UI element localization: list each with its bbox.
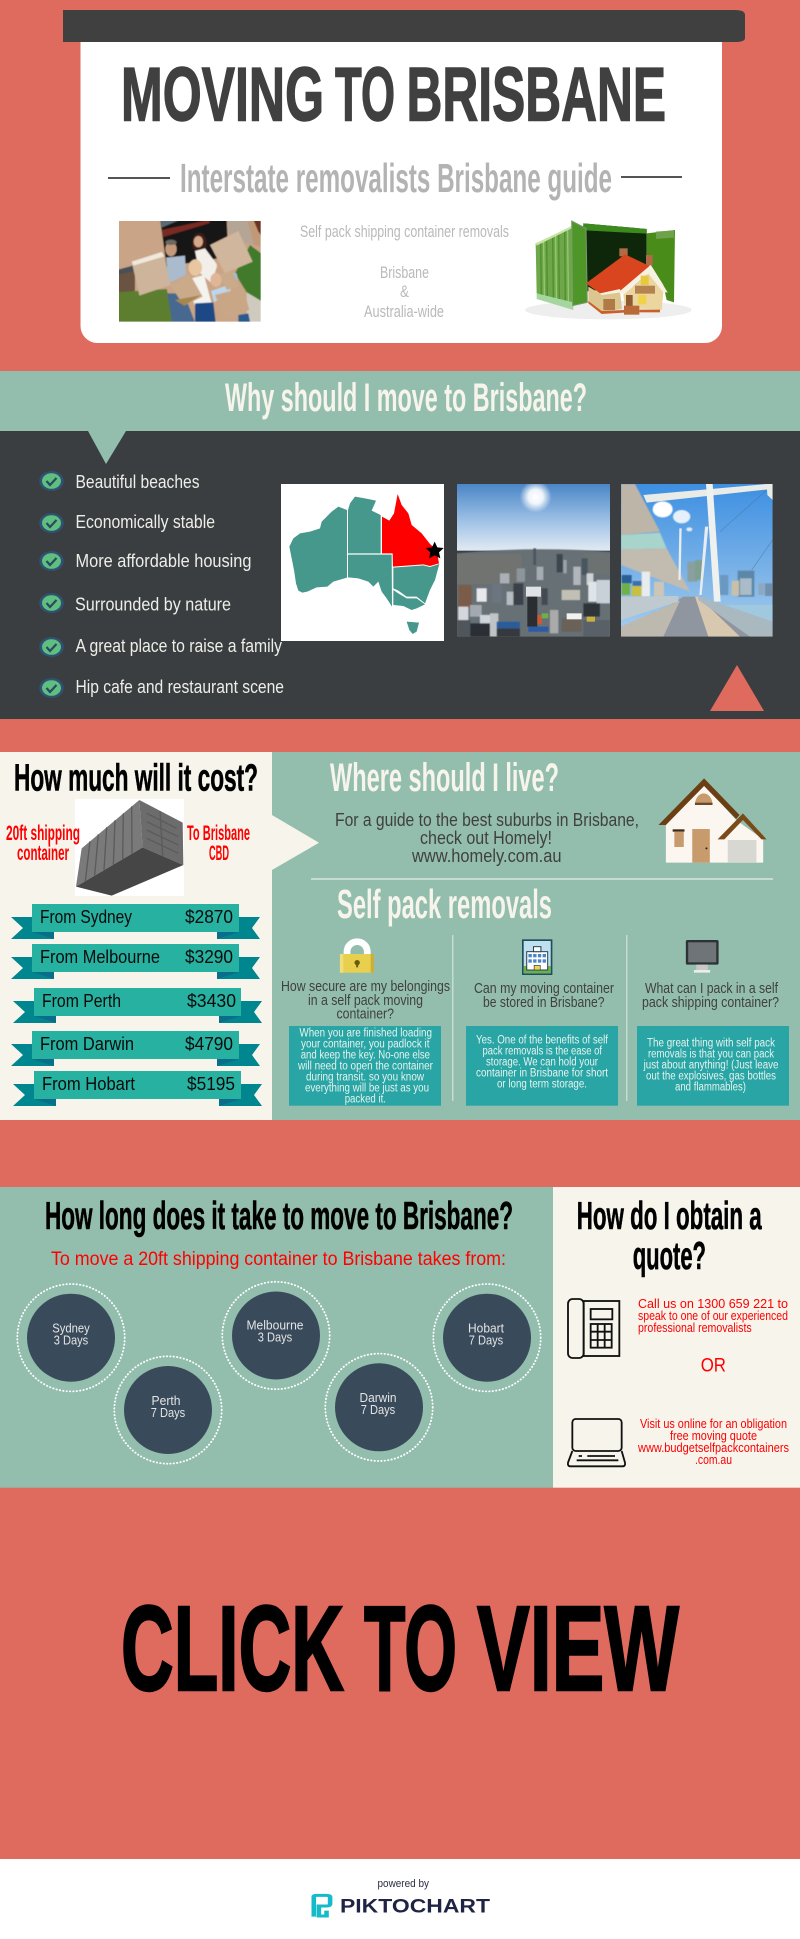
- heading: where should I live: Where should I live?: [330, 756, 559, 800]
- heading: quote: quote?: [633, 1235, 706, 1278]
- title: TO: [335, 52, 395, 138]
- ribbon: Sydney: From Sydney: [40, 907, 132, 927]
- ribbon: Melbourne: $3290: [185, 947, 233, 967]
- tagline text: &: [400, 282, 410, 301]
- question: storage: be stored in Brisbane?: [483, 995, 604, 1011]
- question: storage: Can my moving container: [474, 981, 614, 997]
- answer box: security: everything will be just as you: [305, 1083, 429, 1095]
- question: security: in a self pack moving: [308, 993, 423, 1009]
- list item: raise a family: A great place to raise a family: [76, 636, 282, 656]
- list item: cafe scene: Hip cafe and restaurant scene: [76, 677, 284, 697]
- answer box: what to pack: [637, 1026, 789, 1106]
- call to action: click to view: [121, 1580, 680, 1716]
- Homely guide text: check out Homely!: [420, 828, 552, 848]
- answer box: storage: container in Brisbane for short: [476, 1068, 609, 1080]
- ribbon: Perth: [13, 988, 262, 1023]
- ribbon: Melbourne: [11, 944, 260, 979]
- top dark bar: [63, 10, 745, 42]
- panel: how long does it take: [0, 1187, 553, 1488]
- list item: affordable housing: More affordable housing: [76, 551, 252, 571]
- circle: Hobart: [433, 1284, 541, 1391]
- arrow: [272, 815, 319, 870]
- ribbon: Sydney: $2870: [185, 907, 233, 927]
- answer box: storage: storage. We can hold your: [486, 1057, 598, 1069]
- call us text: Call us on 1300 659 221 to: [638, 1297, 788, 1311]
- panel: how do I obtain a quote: [553, 1187, 800, 1488]
- circle: Sydney: 3 Days: [54, 1334, 88, 1348]
- reasons list: [39, 471, 284, 698]
- tagline text: [300, 222, 509, 321]
- red labels: container: [17, 842, 69, 865]
- red triangle: [710, 665, 764, 711]
- photo: Brisbane aerial view: [455, 481, 612, 638]
- circle: Sydney: [17, 1284, 125, 1391]
- divider line: [311, 878, 773, 880]
- ribbon: Darwin: From Darwin: [40, 1034, 134, 1054]
- visit online text: [637, 1417, 789, 1467]
- circle: Perth: Perth: [152, 1394, 181, 1408]
- icon: house: [658, 778, 767, 863]
- footer: powered by Piktochart: PIKTOCHART: [340, 1897, 490, 1918]
- photo: Kurilpa bridge: [621, 484, 773, 637]
- heading: cost: How much will it cost?: [14, 758, 258, 800]
- OR label: OR: [701, 1356, 726, 1377]
- ribbon: Darwin: $4790: [185, 1034, 233, 1054]
- answer box: security: When you are finished loading: [299, 1028, 432, 1040]
- answer box: storage: or long term storage.: [497, 1079, 587, 1091]
- circle: Darwin: 7 Days: [361, 1403, 395, 1417]
- call us text: professional removalists: [638, 1321, 752, 1335]
- list item: beautiful beaches: [39, 471, 200, 492]
- question: security: How secure are my belongings: [281, 979, 450, 995]
- panel: how much will it cost: [0, 752, 272, 1120]
- question: what to pack: pack shipping container?: [642, 995, 779, 1011]
- column: security: [281, 942, 450, 1106]
- heading: self pack removals: Self pack removals: [337, 881, 552, 927]
- ribbon: Perth: $3430: [187, 991, 236, 1011]
- title: [121, 52, 666, 138]
- circle: Sydney: Sydney: [52, 1322, 90, 1336]
- map of Australia: [281, 484, 444, 641]
- Homely guide text: For a guide to the best suburbs in Brisbane,: [335, 810, 639, 830]
- circle: Hobart: Hobart: [468, 1322, 504, 1336]
- answer box: what to pack: just about anything! (Just leave: [643, 1060, 778, 1072]
- title: BRISBANE: [406, 52, 666, 138]
- red labels: 20ft shipping: [6, 822, 80, 845]
- red labels: [6, 822, 250, 865]
- heading band: why move: [0, 371, 800, 431]
- circle: Darwin: [325, 1354, 433, 1461]
- circle: Melbourne: Melbourne: [246, 1319, 304, 1333]
- answer box: storage: pack removals is the ease of: [482, 1046, 603, 1058]
- panel: title card: [63, 10, 745, 343]
- answer box: what to pack: removals is that you can pack: [648, 1049, 774, 1061]
- circle: Melbourne: [222, 1282, 330, 1389]
- answer box: what to pack: The great thing with self pack: [647, 1038, 775, 1050]
- answer box: security: packed it.: [345, 1094, 386, 1106]
- ribbon: Sydney: [11, 904, 260, 939]
- panel: why move to Brisbane: [0, 431, 800, 719]
- icon: laptop: [568, 1419, 625, 1466]
- pointer triangle: [88, 431, 126, 464]
- call to action: click to view: CLICK: [121, 1580, 344, 1716]
- footer: powered by Piktochart: powered by: [378, 1878, 429, 1890]
- ribbon: Melbourne: From Melbourne: [40, 947, 160, 967]
- answer box: what to pack: and flammables): [675, 1082, 746, 1094]
- footer: powered by Piktochart: [0, 1859, 800, 1939]
- red labels: CBD: [209, 842, 229, 865]
- answer box: security: your container, you padlock it: [301, 1039, 430, 1051]
- red labels: To Brisbane: [187, 822, 250, 845]
- visit online text: free moving quote: [670, 1429, 757, 1443]
- ribbon: Perth: From Perth: [42, 991, 121, 1011]
- tagline text: Australia-wide: [364, 302, 444, 321]
- heading: quote: [577, 1195, 762, 1278]
- ribbon: Darwin: [11, 1031, 260, 1066]
- icon: building: [522, 939, 552, 975]
- icon: monitor: [686, 940, 719, 973]
- ribbon: Hobart: From Hobart: [42, 1074, 135, 1094]
- circle: Perth: 7 Days: [151, 1406, 185, 1420]
- circle: Melbourne: 3 Days: [258, 1331, 292, 1345]
- image: house in green container: [525, 221, 692, 319]
- call to action: click to view: TO: [364, 1580, 457, 1716]
- tagline text: Brisbane: [380, 263, 429, 282]
- icon: padlock: [340, 942, 374, 973]
- list item: surrounded by nature: Surrounded by nature: [75, 594, 231, 614]
- Homely guide text: www.homely.com.au: [411, 846, 562, 866]
- question: security: [281, 979, 450, 1023]
- photo: family with moving boxes: [117, 218, 263, 325]
- answer box: security: during transit. so you know: [306, 1072, 425, 1084]
- call to action: click to view: VIEW: [477, 1580, 680, 1716]
- list item: economically stable: [39, 512, 215, 533]
- answer box: security: and keep the key. No-one else: [301, 1050, 430, 1062]
- circle: Darwin: Darwin: [360, 1391, 397, 1405]
- circle: Hobart: 7 Days: [469, 1334, 503, 1348]
- ribbon: Hobart: [13, 1071, 262, 1106]
- question: security: container?: [336, 1007, 394, 1023]
- icon: telephone: [568, 1299, 619, 1358]
- answer box: storage: [466, 1026, 618, 1106]
- column: storage: [466, 939, 618, 1106]
- title: MOVING: [121, 52, 324, 138]
- question: storage: [474, 981, 614, 1011]
- answer box: security: [289, 1026, 441, 1106]
- answer box: storage: Yes. One of the benefits of self: [476, 1035, 609, 1047]
- answer box: what to pack: out the explosives, gas bottles: [646, 1071, 776, 1083]
- icon: Piktochart logo: [314, 1895, 330, 1917]
- list item: surrounded by nature: [39, 593, 231, 614]
- panel: where to live and self pack removals: [272, 752, 800, 1120]
- Homely guide text: [335, 810, 639, 866]
- tagline text: Self pack shipping container removals: [300, 222, 509, 241]
- question: what to pack: [642, 981, 779, 1011]
- circle: Perth: [114, 1356, 222, 1464]
- call us text: [638, 1297, 788, 1335]
- list item: economically stable: Economically stable: [76, 512, 215, 532]
- column: what to pack: [637, 940, 789, 1106]
- ribbon: Hobart: $5195: [187, 1074, 235, 1094]
- visit online text: .com.au: [695, 1453, 732, 1467]
- subheading: transit intro: To move a 20ft shipping container to Brisbane takes from:: [51, 1249, 506, 1270]
- answer box: security: will need to open the container: [297, 1061, 433, 1073]
- list item: beautiful beaches: Beautiful beaches: [76, 472, 200, 492]
- question: what to pack: What can I pack in a self: [645, 981, 779, 997]
- shipping container image: [75, 799, 184, 896]
